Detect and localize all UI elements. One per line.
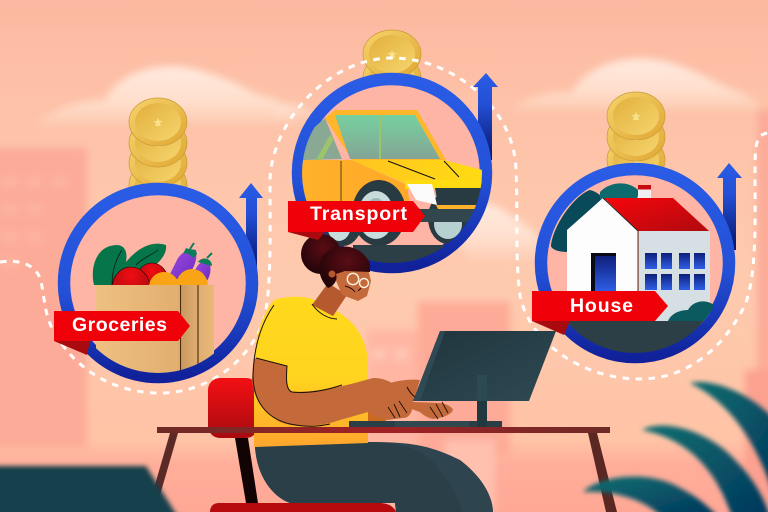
person: far hand on keyboard	[390, 380, 453, 419]
foreground: plant leaves	[583, 382, 768, 512]
person: arm	[252, 358, 412, 426]
computer monitor	[349, 331, 556, 427]
desk top	[157, 427, 610, 433]
label: house: House	[570, 295, 633, 317]
background clouds	[35, 58, 762, 262]
label: groceries: Groceries	[72, 314, 167, 336]
circle: transport	[298, 79, 490, 267]
background building centre	[367, 302, 510, 512]
person: finger lines	[388, 401, 448, 419]
arrow: house	[717, 163, 742, 250]
circle: groceries	[64, 189, 252, 380]
person: chair	[208, 378, 396, 512]
label: house	[532, 291, 668, 335]
arrow: groceries	[239, 183, 263, 270]
shirt sleeve and collar lines	[253, 304, 415, 426]
label: transport: Transport	[310, 203, 408, 225]
icon: yellow car	[300, 110, 490, 265]
person: pants	[255, 442, 493, 512]
icon: house	[551, 183, 714, 353]
circle: house	[540, 169, 730, 361]
coins: groceries	[129, 98, 187, 209]
foreground: dark blurred block	[0, 466, 178, 512]
person: torso with yellow shirt	[254, 297, 368, 447]
glasses	[347, 273, 368, 288]
arrow: transport	[473, 73, 498, 160]
label: groceries	[54, 311, 190, 355]
desk legs	[152, 433, 617, 512]
hair	[319, 246, 370, 288]
background building left	[0, 148, 87, 448]
person: neck and head	[301, 234, 371, 316]
icon: grocery bag	[93, 243, 214, 380]
dashed connecting line	[0, 58, 768, 393]
label: transport	[288, 201, 425, 240]
background building right	[745, 110, 768, 512]
coins: house	[607, 92, 665, 184]
coins: transport	[363, 30, 421, 102]
person: shirt hem by wrist	[368, 410, 386, 422]
